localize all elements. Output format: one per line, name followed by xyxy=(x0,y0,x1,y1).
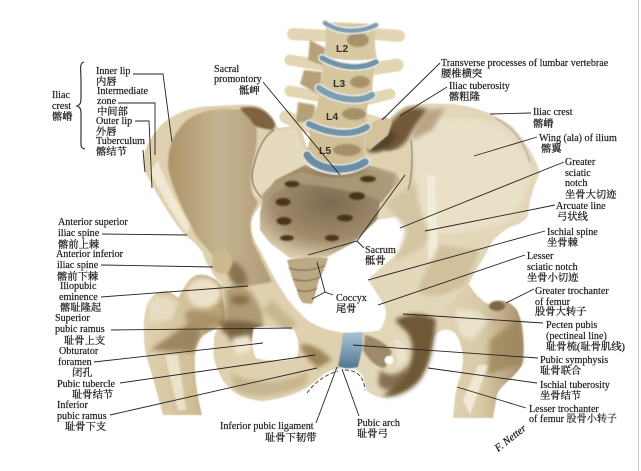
bones artwork xyxy=(143,22,540,418)
callout: inner lip xyxy=(96,66,172,142)
callout: iliopubic eminence: Iliopubic xyxy=(60,281,97,292)
callout: anterior superior iliac spine: iliac spine xyxy=(58,228,100,239)
callout: greater trochanter: Greater trochanter xyxy=(535,286,609,297)
callout: superior pubic ramus: 耻骨上支 xyxy=(64,334,105,347)
callout: superior pubic ramus: pubic ramus xyxy=(55,324,105,335)
callout: iliac crest group: 髂嵴 xyxy=(52,110,73,123)
callout: anterior inferior iliac spine: 髂前下棘 xyxy=(57,270,99,283)
callout: ischial tuberosity: 坐骨结节 xyxy=(540,389,581,402)
callout: obturator foramen xyxy=(58,343,263,379)
vertebra label L4: L4 xyxy=(326,111,338,123)
callout: inferior pubic ramus xyxy=(57,368,317,433)
callout: lesser sciatic notch: sciatic notch xyxy=(527,262,578,273)
callout: outer lip: Outer lip xyxy=(96,116,132,127)
page edge line xyxy=(638,0,639,471)
callout: pecten pubis xyxy=(403,314,625,353)
callout: tuberculum: Tuberculum xyxy=(96,136,145,147)
vertebra label L2: L2 xyxy=(336,43,348,55)
left auricular region xyxy=(251,128,310,198)
left obturator foramen xyxy=(252,327,298,361)
inferior arch dashed ligament xyxy=(307,370,365,393)
callout: lesser sciatic notch: 坐骨小切迹 xyxy=(527,271,579,284)
left femur xyxy=(144,275,230,415)
callout: superior pubic ramus xyxy=(55,313,292,347)
right pubic and ischial shading xyxy=(418,245,480,295)
callout: coccyx xyxy=(312,262,367,315)
callout: inferior pubic ramus: Inferior xyxy=(57,400,88,411)
callout: ischial spine: Ischial spine xyxy=(547,227,598,238)
callout: iliopubic eminence: eminence xyxy=(59,292,98,303)
callout: iliac tuberosity: Iliac tuberosity xyxy=(449,81,510,92)
callout: pubic symphysis: Pubic symphysis xyxy=(540,355,608,366)
callout: lesser trochanter: of femur 股骨小转子 xyxy=(529,412,617,425)
callout: obturator foramen: foramen xyxy=(58,357,92,368)
lumbar vertebrae xyxy=(286,22,399,169)
artist signature: F. Netter xyxy=(492,423,529,455)
callout: sacral promontory: promontory xyxy=(214,74,262,85)
callout: pecten pubis: 耻骨梳(耻骨肌线) xyxy=(546,340,625,353)
callout: wing of ilium: 髂翼 xyxy=(541,142,562,155)
pubic symphysis xyxy=(338,332,363,368)
callout: ischial tuberosity xyxy=(428,368,610,402)
callout: iliac crest right xyxy=(490,107,573,130)
callout: anterior inferior iliac spine: iliac spine xyxy=(57,260,99,271)
callout: anterior superior iliac spine: 髂前上棘 xyxy=(58,238,100,251)
callout: iliac crest right: 髂嵴 xyxy=(533,117,554,130)
callout: greater trochanter: of femur xyxy=(535,297,571,308)
callout: lesser trochanter xyxy=(457,387,617,425)
callout: sacrum xyxy=(308,175,405,267)
callout: transverse processes: 腰椎横突 xyxy=(441,67,483,80)
callout: lesser trochanter: Lesser trochanter xyxy=(529,404,599,415)
right femur xyxy=(420,275,524,418)
callout: anterior superior iliac spine: Anterior superior xyxy=(58,217,128,228)
sacral foramina xyxy=(276,176,376,241)
vertebra label L5: L5 xyxy=(319,145,331,157)
callout: pubic symphysis xyxy=(353,345,608,377)
callout: iliac tuberosity: 髂粗隆 xyxy=(449,90,481,103)
coccyx xyxy=(287,257,328,304)
vertebra label L3: L3 xyxy=(333,78,345,90)
callout: intermediate zone: zone xyxy=(97,96,117,107)
sacrum xyxy=(260,165,400,258)
callout: pecten pubis: Pecten pubis xyxy=(546,320,597,331)
callout: lesser sciatic notch: Lesser xyxy=(527,251,554,262)
callout: inferior pubic ramus: pubic ramus xyxy=(57,411,107,422)
callout: pubic arch: Pubic arch xyxy=(357,418,400,429)
vertebra L4 xyxy=(308,90,372,128)
vertebra shading xyxy=(333,33,370,156)
callout: iliopubic eminence xyxy=(59,281,248,314)
callout: sacrum: 骶骨 xyxy=(365,254,386,267)
callout: intermediate zone xyxy=(97,86,155,155)
callout: pubic tubercle: 耻骨结节 xyxy=(72,388,113,401)
callout: arcuate line xyxy=(425,201,606,231)
callout: anterior superior iliac spine xyxy=(58,217,187,251)
callout: inferior pubic ligament: 耻骨下韧带 xyxy=(265,431,316,444)
callout: arcuate line: 弓状线 xyxy=(557,210,589,223)
callout: intermediate zone: 中间部 xyxy=(97,105,128,118)
callout: transverse processes: Transverse processes of lumbar vertebrae xyxy=(441,58,609,69)
callout: greater trochanter: 股骨大转子 xyxy=(535,305,586,318)
callout: pubic arch: 耻骨弓 xyxy=(357,427,388,440)
callout: superior pubic ramus: Superior xyxy=(55,313,90,324)
callout: iliac crest group: Iliac xyxy=(52,90,70,101)
callout: obturator foramen: Obturator xyxy=(59,346,99,357)
callout: sacral promontory: 骶岬 xyxy=(239,84,260,97)
left acetabulum shading xyxy=(222,286,263,334)
callout: inner lip: Inner lip xyxy=(96,66,130,77)
callout: greater sciatic notch: Greater xyxy=(565,157,596,168)
callout: wing of ilium xyxy=(474,133,617,156)
callout: wing of ilium: Wing (ala) of ilium xyxy=(539,133,617,144)
callout: anterior inferior iliac spine xyxy=(56,249,213,283)
transverse processes xyxy=(286,34,399,128)
callout: ischial spine: 坐骨棘 xyxy=(547,236,579,249)
callout: outer lip: 外唇 xyxy=(96,125,117,138)
callout: inferior pubic ramus: 耻骨下支 xyxy=(65,420,106,433)
callout: greater trochanter xyxy=(506,286,609,318)
callout: iliac crest group: crest xyxy=(52,101,71,112)
callout: inferior pubic ligament: Inferior pubic ligament xyxy=(220,421,314,432)
callout: sacral promontory xyxy=(214,64,340,175)
callout: lesser sciatic notch xyxy=(378,251,579,305)
vertebra L5 xyxy=(305,125,367,169)
callout: ischial spine xyxy=(368,227,598,280)
callout: intermediate zone: Intermediate xyxy=(97,86,149,97)
callout: greater sciatic notch xyxy=(400,157,617,228)
callout: anterior inferior iliac spine: Anterior inferior xyxy=(56,249,124,260)
vertebra L2 xyxy=(323,22,377,60)
callout: greater sciatic notch: notch xyxy=(565,178,587,189)
callout: iliac tuberosity xyxy=(400,81,510,116)
callout: iliac crest group xyxy=(52,62,85,149)
vertebra L3 xyxy=(320,62,376,97)
left iliac fossa xyxy=(168,109,272,288)
callout: obturator foramen: 闭孔 xyxy=(72,366,93,379)
right hip bone xyxy=(343,104,540,398)
callout: tuberculum xyxy=(96,136,145,172)
callout: pubic tubercle: Pubic tubercle xyxy=(57,379,116,390)
callout: coccyx: Coccyx xyxy=(336,293,367,304)
callout: tuberculum: 髂结节 xyxy=(96,145,127,158)
right iliac fossa xyxy=(412,118,532,235)
callout: ischial tuberosity: Ischial tuberosity xyxy=(540,380,610,391)
callout: pubic arch xyxy=(342,369,400,440)
callout: transverse processes xyxy=(382,58,609,120)
callout: arcuate line: Arcuate line xyxy=(556,201,606,212)
callout: pubic symphysis: 耻骨联合 xyxy=(540,364,581,377)
callout: sacrum: Sacrum xyxy=(365,245,396,256)
right obturator opening xyxy=(384,356,394,364)
callout: pubic tubercle xyxy=(57,355,315,401)
left hip bone xyxy=(143,105,345,401)
callout: iliopubic eminence: 髂耻隆起 xyxy=(60,301,101,314)
callout: sacral promontory: Sacral xyxy=(214,64,239,75)
callout: iliac crest right: Iliac crest xyxy=(533,107,573,118)
intervertebral discs xyxy=(307,23,376,169)
callout: inferior pubic ligament xyxy=(220,367,337,444)
callout: pecten pubis: (pectineal line) xyxy=(546,331,607,342)
callout: inner lip: 内唇 xyxy=(96,75,117,88)
callout: greater sciatic notch: sciatic xyxy=(565,168,591,179)
callout: outer lip xyxy=(96,116,152,188)
callout: coccyx: 尾骨 xyxy=(336,303,357,315)
callout: greater sciatic notch: 坐骨大切迹 xyxy=(565,188,617,201)
